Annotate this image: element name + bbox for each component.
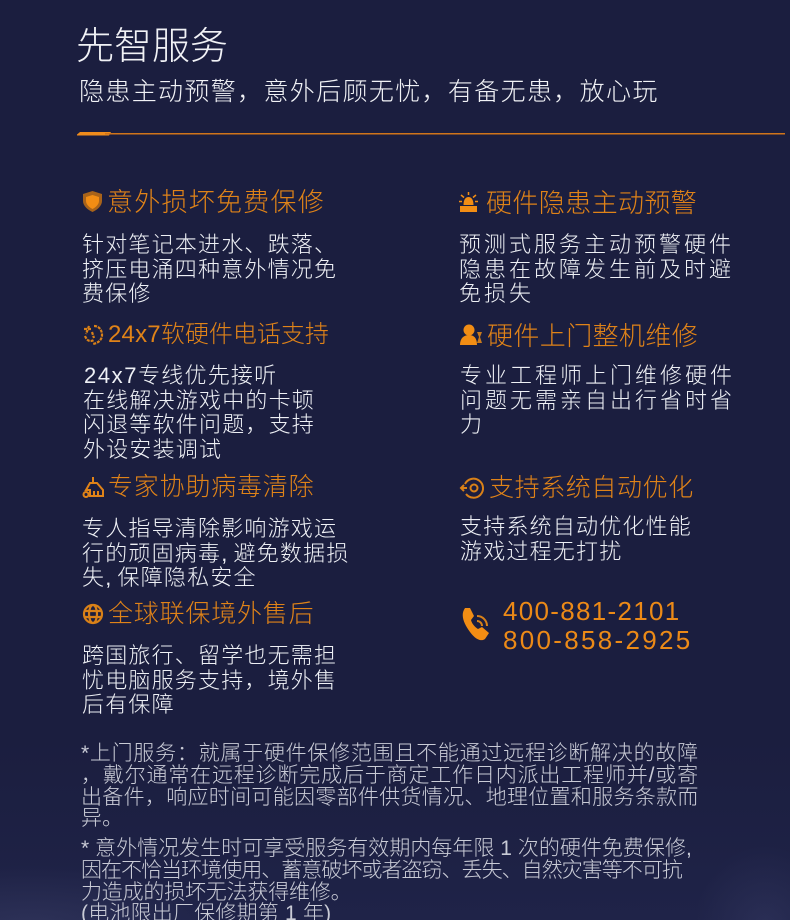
text: virus removal — [82, 516, 350, 590]
text: virus removal: 专人指导清除影响游戏运 — [82, 516, 337, 541]
text: proactive alert: 隐患在故障发生前及时避 — [459, 256, 734, 282]
heading: virus removal: 专家协助病毒清除 — [108, 473, 314, 501]
icon: globe — [82, 604, 104, 624]
divider line — [77, 132, 785, 136]
phone numbers: 800-858-2925 — [503, 625, 693, 655]
title: 先智服务 — [76, 26, 228, 68]
text: virus removal: 行的顽固病毒,避免数据损 — [82, 540, 350, 566]
text: system optimize: 支持系统自动优化性能 — [460, 514, 692, 539]
text: phone support: 闪退等软件问题，支持 — [83, 412, 315, 437]
text: phone support: 24x7专线优先接听 — [84, 363, 277, 388]
text: proactive alert: 预测式服务主动预警硬件 — [459, 232, 734, 257]
phone numbers: 400-881-2101 — [503, 596, 681, 626]
text: proactive alert: 免损失 — [459, 281, 534, 306]
icon: shield — [83, 191, 102, 212]
text: on-site repair — [460, 363, 735, 437]
footnote: on-site service: 出备件，响应时间可能因零部件供货情况、地理位置和服务条款而 — [81, 786, 699, 809]
text: system optimize: 游戏过程无打扰 — [460, 539, 622, 564]
icon: alarm — [459, 192, 478, 212]
text: accident repair: 费保修 — [82, 281, 152, 306]
text: on-site repair: 专业工程师上门维修硬件 — [460, 363, 735, 388]
phone numbers — [503, 596, 693, 655]
icon: phone — [462, 608, 489, 640]
heading: accident repair: 意外损坏免费保修 — [107, 187, 325, 217]
text: accident repair: 针对笔记本进水、跌落、 — [82, 232, 337, 257]
heading: on-site repair: 硬件上门整机维修 — [487, 321, 698, 351]
footnote: accident coverage: * 意外情况发生时可享受服务有效期内每年限 1 次的硬件免费保修, — [81, 837, 692, 860]
text: virus removal: 失,保障隐私安全 — [82, 565, 257, 590]
heading: proactive alert: 硬件隐患主动预警 — [486, 188, 697, 218]
footnote: accident coverage: 因在不恰当环境使用、蓄意破坏或者盗窃、丢失、自然灾害等不可抗 — [81, 859, 682, 882]
footnote: accident coverage — [81, 837, 692, 920]
subtitle: 隐患主动预警，意外后顾无忧，有备无患，放心玩 — [79, 78, 659, 106]
footnote: on-site service: ，戴尔通常在远程诊断完成后于商定工作日内派出工程师并/或寄 — [81, 764, 699, 787]
heading: system optimize: 支持系统自动优化 — [489, 474, 694, 502]
text: accident repair: 挤压电涌四种意外情况免 — [82, 256, 337, 282]
text: proactive alert — [459, 232, 734, 306]
footnote: on-site service: 异。 — [81, 807, 123, 830]
text: accident repair — [82, 232, 337, 306]
text: phone support: 在线解决游戏中的卡顿 — [83, 388, 315, 412]
text: system optimize — [460, 514, 692, 564]
text: global warranty: 后有保障 — [82, 692, 175, 717]
heading: phone support: 24x7软硬件电话支持 — [108, 321, 329, 348]
heading: global warranty: 全球联保境外售后 — [108, 600, 314, 628]
text: on-site repair: 问题无需亲自出行省时省 — [460, 388, 735, 412]
icon: phone support — [84, 324, 104, 345]
text: global warranty: 忧电脑服务支持，境外售 — [82, 668, 337, 692]
icon: optimize — [460, 478, 484, 499]
text: phone support — [83, 363, 315, 462]
icon: broom — [82, 477, 104, 498]
text: global warranty: 跨国旅行、留学也无需担 — [82, 643, 337, 668]
text: phone support: 外设安装调试 — [83, 436, 222, 462]
icon: technician — [460, 324, 482, 345]
footnote: on-site service: *上门服务：就属于硬件保修范围且不能通过远程诊断解决的故障 — [81, 742, 699, 765]
footnote: on-site service — [81, 742, 699, 830]
text: global warranty — [82, 643, 337, 717]
text: on-site repair: 力 — [460, 412, 485, 437]
footnote: accident coverage: 力造成的损坏无法获得维修。 — [81, 881, 351, 904]
